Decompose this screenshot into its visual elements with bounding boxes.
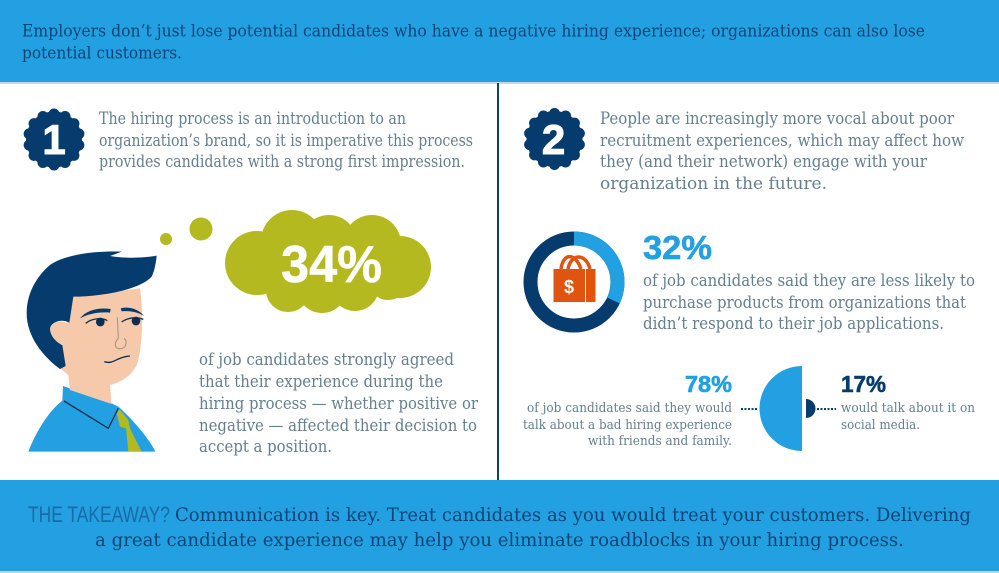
mouth (104, 356, 130, 362)
text: 32% description: didn’t respond to their job applications. (643, 314, 944, 334)
shirt (28, 386, 155, 452)
icon: shopping bag: $ (564, 277, 574, 297)
stat: 32%: 32% (643, 229, 712, 266)
brows (80, 308, 144, 318)
tie (117, 409, 142, 452)
dotted connectors (741, 408, 836, 410)
half-circle chart: 17% (806, 399, 816, 418)
text: 34% description: accept a position. (199, 437, 332, 457)
text: section 1 intro: provides candidates with a strong first impression. (99, 152, 465, 172)
text: section 2 intro: People are increasingly more vocal about poor (600, 109, 955, 129)
text: 32% description (643, 271, 975, 334)
cloud with 34%: 34% (281, 236, 382, 294)
takeaway banner: THE TAKEAWAY? (28, 502, 170, 527)
text: section 2 intro: they (and their network) engage with your (600, 152, 928, 172)
takeaway banner: a great candidate experience may help you eliminate roadblocks in your hiring process. (95, 530, 904, 551)
stat: 78%: 78% (685, 371, 732, 397)
text: section 2 intro (600, 109, 964, 194)
text: section 1 intro: The hiring process is an introduction to an (99, 109, 406, 129)
top banner (0, 0, 999, 84)
hair (27, 251, 157, 369)
cloud with 34% (225, 210, 431, 313)
text: 17% description: would talk about it on (841, 401, 976, 416)
top banner: potential customers. (22, 44, 182, 64)
neck and face (60, 288, 142, 404)
text: 78% description (523, 401, 732, 449)
nose (115, 317, 126, 349)
icon: man illustration (27, 251, 157, 452)
text: 34% description: negative — affected their decision to (199, 416, 477, 436)
icon: number 1 badge (24, 108, 84, 170)
takeaway banner (0, 480, 999, 573)
text: section 2 intro: organization in the future. (600, 174, 827, 194)
icon: thought bubbles (160, 218, 212, 245)
donut chart: 32% (530, 238, 618, 326)
icon: number 1 badge: 1 (42, 116, 66, 163)
text: 34% description: of job candidates strongly agreed (199, 350, 454, 370)
ear (49, 321, 72, 344)
text: section 2 intro: recruitment experiences, which may affect how (600, 131, 964, 151)
text: 34% description (199, 350, 479, 457)
text: 17% description (841, 401, 976, 433)
takeaway banner: Communication is key. Treat candidates as you would treat your customers. Delivering (175, 505, 971, 526)
text: 78% description: of job candidates said they would (527, 401, 732, 416)
stat: 17%: 17% (841, 371, 886, 397)
icon: number 2 badge (524, 108, 585, 170)
text: 34% description: hiring process — whether positive or (199, 394, 479, 414)
half-circle chart: 78% (760, 366, 802, 451)
collar (64, 401, 118, 428)
text: section 1 intro: organization’s brand, so it is imperative this process (99, 131, 473, 151)
text: 78% description: with friends and family. (588, 434, 732, 449)
icon: number 2 badge: 2 (542, 116, 565, 163)
text: 34% description: that their experience during the (199, 372, 443, 392)
top banner: Employers don’t just lose potential candidates who have a negative hiring experience; organizations can also lose (22, 22, 925, 42)
text: 17% description: social media. (841, 418, 920, 433)
eyes (86, 318, 143, 323)
center divider (497, 83, 499, 480)
icon: shopping bag (554, 257, 596, 302)
text: 78% description: talk about a bad hiring experience (523, 418, 732, 433)
text: section 1 intro (99, 109, 473, 172)
